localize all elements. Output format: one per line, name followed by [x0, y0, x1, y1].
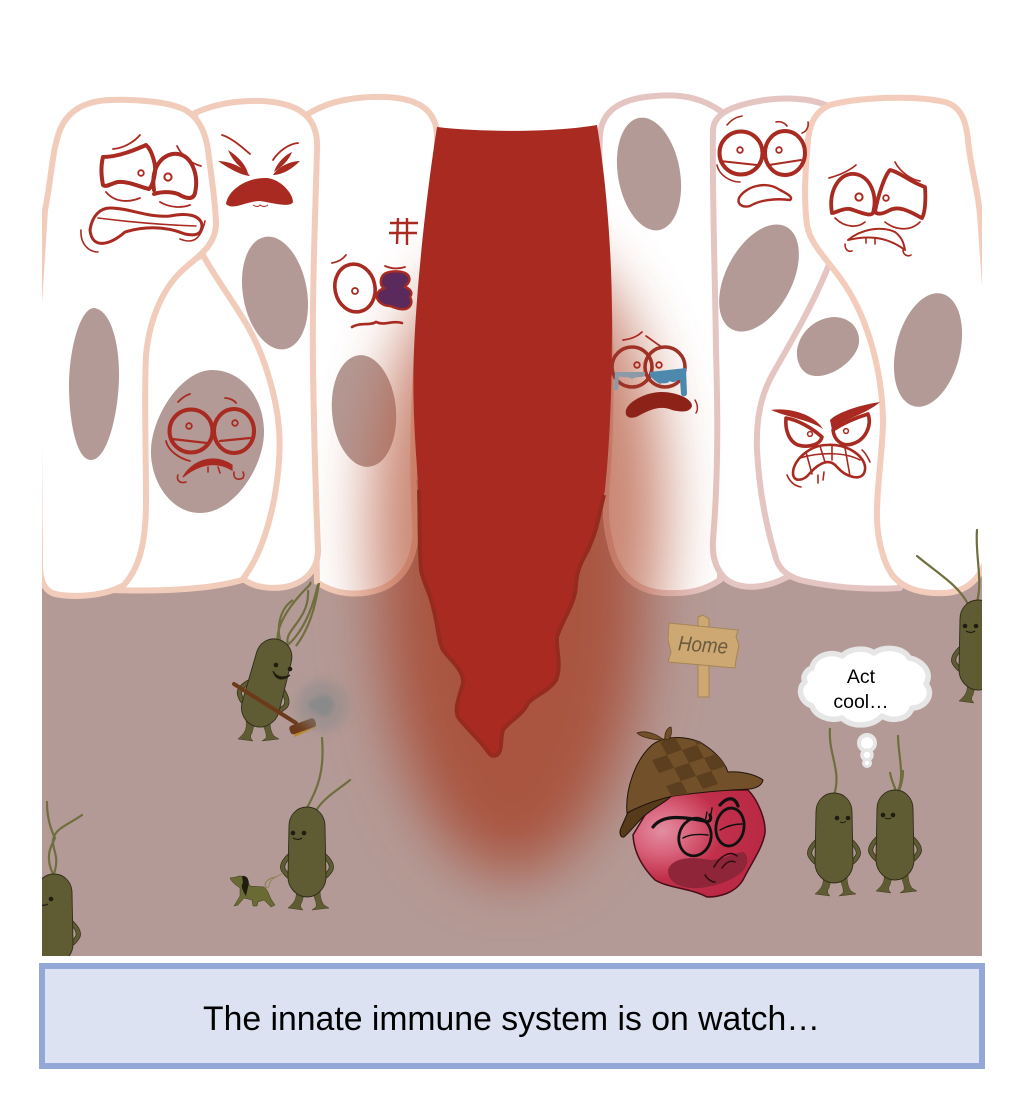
nucleus: cell right of wound [616, 118, 682, 230]
wound [413, 125, 612, 756]
bacterium: walking dog [283, 738, 350, 910]
thought bubble: cool… [833, 691, 889, 713]
epithelial cell: top left [38, 100, 216, 596]
home sign [668, 615, 739, 697]
immune cell detective [620, 727, 765, 897]
bacterium: right companion [871, 735, 919, 893]
nucleus: bruised cell [332, 355, 396, 467]
nucleus: upper right middle cell [719, 224, 799, 332]
epithelial cell: bruised, left of wound [308, 97, 437, 594]
face: bruised cell [330, 255, 411, 327]
inflammation glow in tissue [380, 305, 644, 875]
epithelial cell: tall behind [195, 101, 318, 588]
detective face [653, 799, 747, 882]
epithelial cell: right of wound [599, 95, 722, 593]
bacterium: right edge [916, 528, 982, 704]
bacterium: left edge [42, 800, 84, 956]
scene clipped to picture frame [30, 95, 1002, 977]
nucleus: lower cell [151, 370, 264, 513]
nucleus: tall cell [242, 236, 308, 350]
caption text: The innate immune system is on watch… [203, 1000, 820, 1038]
face: wide eyes top right [717, 116, 808, 207]
dog [230, 873, 283, 907]
bacterium: sweeping [232, 582, 319, 741]
nucleus: far left cell [69, 308, 119, 460]
face: worried top right [829, 162, 925, 256]
face: grimacing top left [81, 135, 205, 252]
dust cloud [296, 680, 348, 732]
face: scrunched angry [218, 135, 300, 206]
epithelial cell: lower right middle [757, 250, 900, 589]
epithelial cell: lower with face in nucleus [112, 255, 280, 591]
thought bubble [801, 648, 929, 766]
inflammation tint on right cell [603, 230, 708, 596]
broom [234, 684, 317, 737]
face: on nucleus [166, 394, 254, 483]
mark: hash symbol [389, 218, 418, 245]
thought bubble: Act [847, 666, 876, 688]
nucleus: lower right middle cell [797, 317, 859, 376]
face: furious [771, 402, 880, 487]
epithelial cell: upper right middle [713, 98, 835, 587]
nucleus: far right cell [894, 293, 962, 407]
inflammation tint on left cell [326, 248, 422, 596]
tissue background [42, 480, 982, 956]
deerstalker hat [620, 727, 763, 837]
immune cell body [633, 790, 765, 897]
epithelial cell: top right [805, 98, 986, 593]
bacterium: with thought bubble [810, 728, 858, 896]
caption box [42, 966, 982, 1066]
home sign: Home [677, 632, 729, 659]
face: crying [612, 332, 697, 418]
cell shadow [668, 852, 747, 888]
